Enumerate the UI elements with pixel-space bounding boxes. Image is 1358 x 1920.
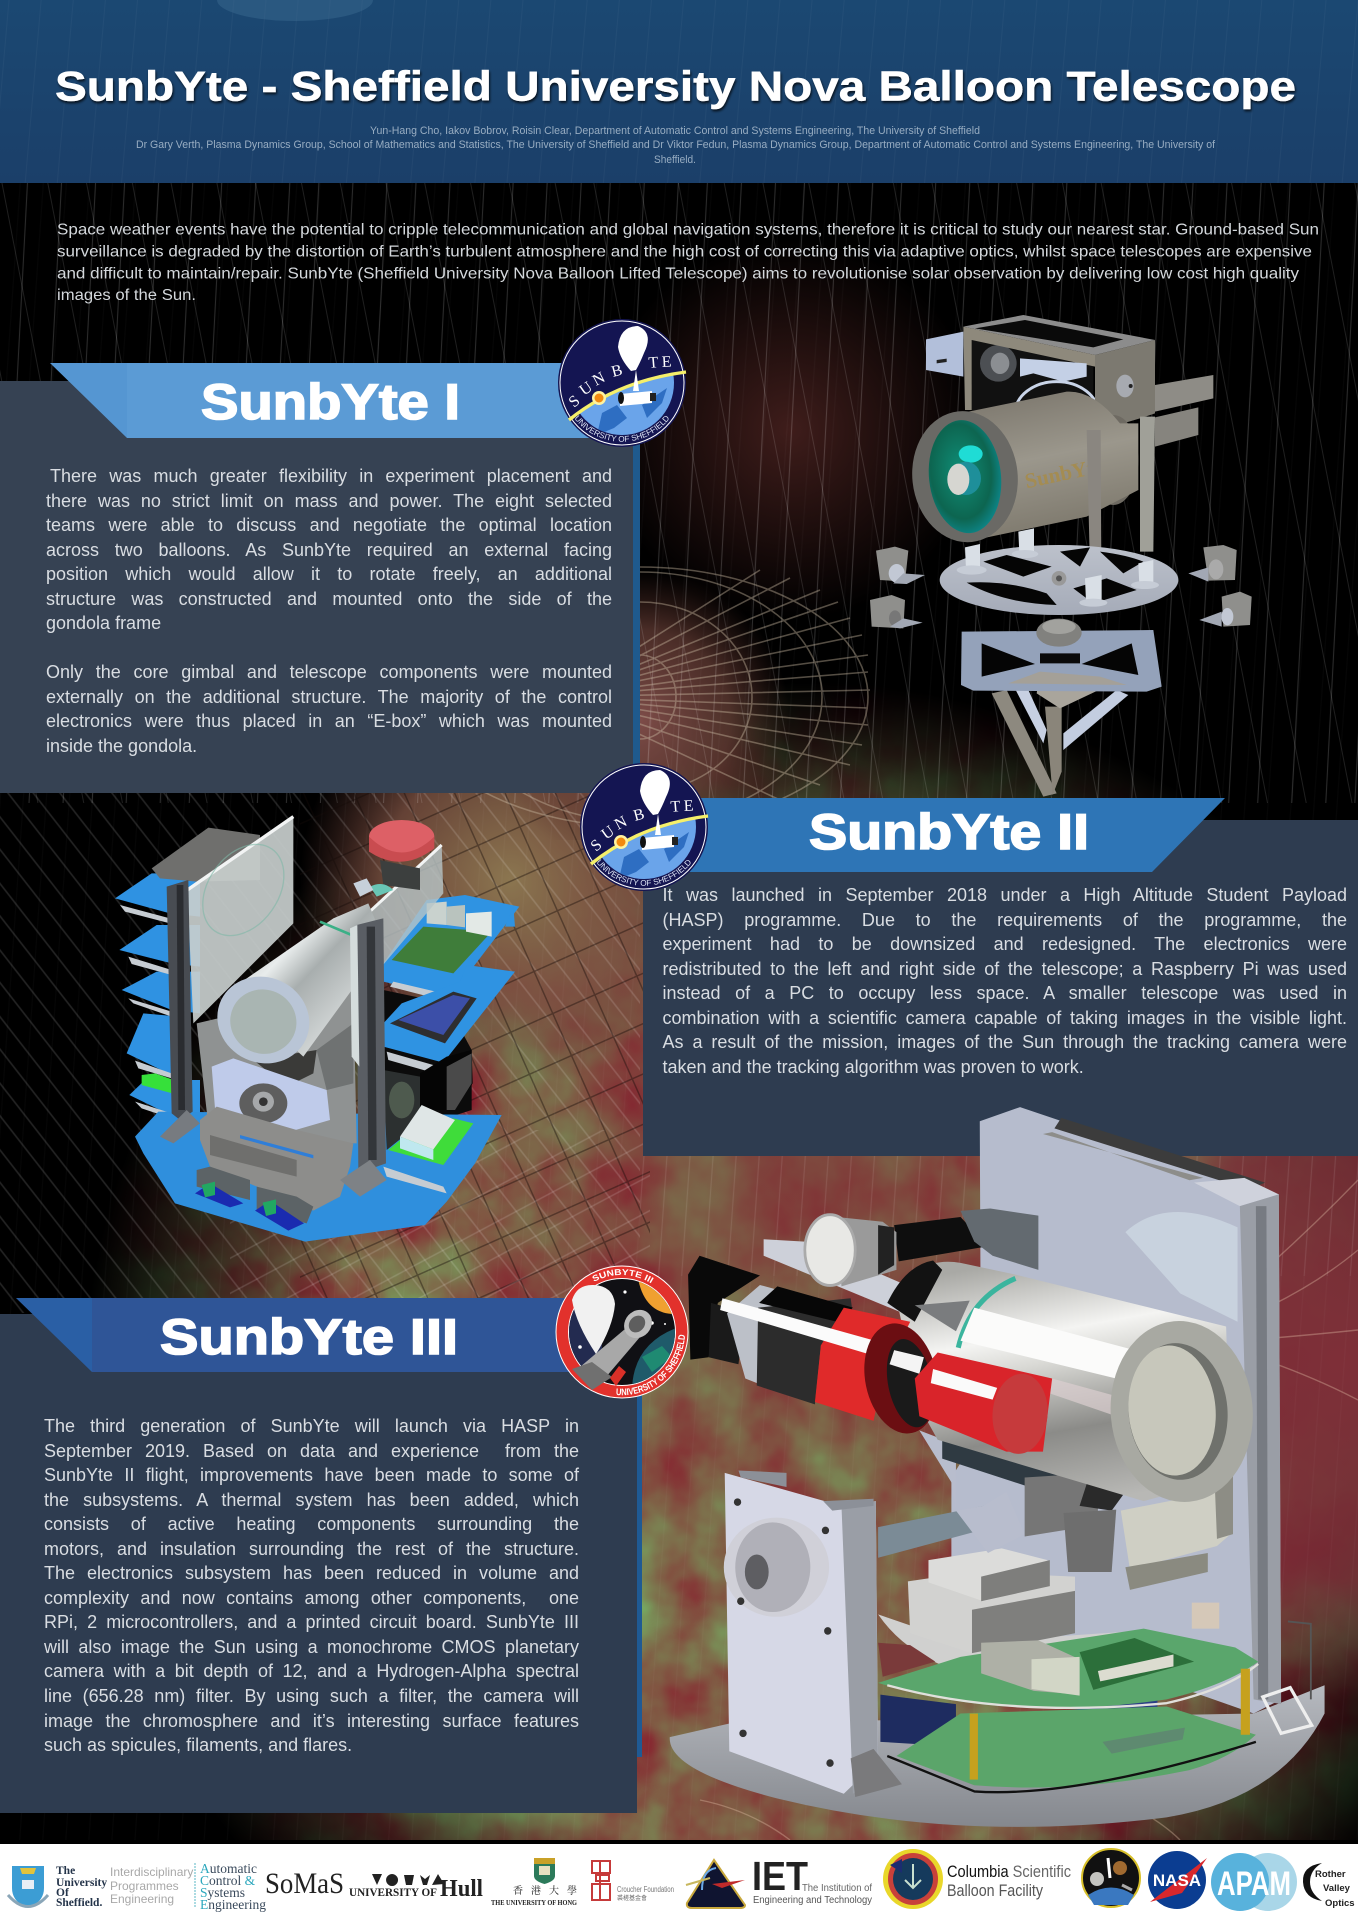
logo: University of Sheffield: The bbox=[56, 1865, 75, 1877]
body text: SunbYte II bbox=[662, 885, 1347, 1077]
body text: SunbYte II: It was launched in September 2018 under a High Altitude Student Payload bbox=[662, 885, 1347, 905]
badge: SunbYte III mission patch bbox=[556, 1266, 688, 1398]
logo: IET: Engineering and Technology bbox=[753, 1895, 872, 1906]
body text: SunbYte III: line (656.28 nm) filter. By using such a filter, the camera will bbox=[44, 1686, 579, 1706]
logo: University of Hong Kong: THE UNIVERSITY OF HONG bbox=[491, 1898, 577, 1907]
logo: Croucher Foundation: 裘槎基金會 bbox=[617, 1893, 647, 1902]
badge: SunbYte II mission patch: N bbox=[612, 813, 630, 834]
authors line 3: Sheffield. bbox=[654, 154, 696, 166]
logo: Automatic Control and Systems Engineering bbox=[195, 1861, 266, 1912]
body text: SunbYte II: instead of a PC to occupy less space. A smaller telescope was used in bbox=[662, 983, 1347, 1003]
panel: SunbYte II bbox=[643, 798, 1358, 1156]
body text: SunbYte III: such as spicules, filaments, and flares. bbox=[44, 1735, 352, 1755]
body text: SunbYte I: gondola frame bbox=[46, 613, 161, 633]
body text: SunbYte III: The third generation of SunbYte will launch via HASP in bbox=[44, 1416, 579, 1436]
badge: SunbYte I mission patch bbox=[558, 319, 686, 447]
illustration: SunbYte I exploded telescope and gimbal: SunbYt bbox=[1023, 455, 1097, 493]
ribbon and heading: SunbYte III bbox=[16, 1298, 569, 1372]
logo: Interdisciplinary Programmes Engineering bbox=[110, 1865, 193, 1906]
logo: Automatic Control and Systems Engineering: Systems bbox=[200, 1885, 245, 1900]
body text: SunbYte III: will also image the Sun using a monochrome CMOS planetary bbox=[44, 1637, 579, 1657]
badge: SunbYte I mission patch: N bbox=[590, 369, 608, 390]
body text: SunbYte I bbox=[46, 466, 612, 756]
logo: HASP mission patch bbox=[1082, 1849, 1140, 1907]
header band bbox=[0, 0, 1358, 183]
ribbon and heading: SunbYte I: SunbYte I bbox=[201, 374, 460, 430]
body text: SunbYte I: teams were able to discuss and negotiate the optimal location bbox=[46, 515, 612, 535]
body text: SunbYte I: across two balloons. As SunbYte required an external facing bbox=[46, 540, 612, 560]
body text: SunbYte III: SunbYte II flight, improvements have been made to some of bbox=[44, 1465, 579, 1485]
badge: SunbYte II mission patch bbox=[580, 763, 708, 891]
logo: NASA: NASA bbox=[1153, 1871, 1201, 1890]
body text: SunbYte I: position which would allow it to rotate freely, an additional bbox=[46, 564, 612, 584]
logo: IET: IET bbox=[752, 1853, 808, 1899]
ribbon and heading: SunbYte I bbox=[50, 363, 590, 438]
body text: SunbYte III: motors, and insulation surrounding the rest of the structure. bbox=[44, 1539, 579, 1559]
body text: SunbYte I: There was much greater flexibility in experiment placement and bbox=[50, 466, 612, 486]
logo: Rother Valley Optics: Valley bbox=[1323, 1883, 1351, 1894]
logo: Automatic Control and Systems Engineering: Automatic bbox=[200, 1861, 257, 1876]
logo strip bbox=[0, 1840, 1358, 1920]
logo: University of Sheffield: Of bbox=[56, 1887, 69, 1899]
intro text: and difficult to maintain/repair. SunbYte (Sheffield University Nova Balloon Lifted Telescope) aims to revolutionise solar observation by delivering low cost high quality bbox=[57, 266, 1299, 282]
intro text bbox=[57, 222, 1319, 304]
logo: University of Sheffield: Sheffield. bbox=[56, 1897, 102, 1909]
logo: University of Hull bbox=[349, 1874, 483, 1902]
body text: SunbYte II: combination with a scientific camera capable of taking images in the visible light. bbox=[662, 1008, 1347, 1028]
panel: SunbYte III bbox=[0, 1298, 642, 1813]
body text: SunbYte III: camera with a bit depth of 12, and a Hydrogen-Alpha spectral bbox=[44, 1661, 579, 1681]
body text: SunbYte III: The electronics subsystem has been reduced in volume and bbox=[44, 1563, 579, 1583]
body text: SunbYte I: externally on the additional structure. The majority of the control bbox=[46, 687, 612, 707]
badge: SunbYte II mission patch: S bbox=[588, 836, 605, 855]
logo: Columbia Scientific Balloon Facility: Columbia Scientific bbox=[947, 1863, 1071, 1881]
logo: IET: The Institution of bbox=[802, 1883, 872, 1894]
badge: SunbYte I mission patch: S bbox=[566, 392, 583, 411]
logo: NASA bbox=[1148, 1851, 1207, 1909]
ribbon and heading: SunbYte III: SunbYte III bbox=[160, 1309, 458, 1365]
logo: Interdisciplinary Programmes Engineering: Programmes bbox=[110, 1879, 179, 1893]
body text: SunbYte I: structure was constructed and mounted onto the side of the bbox=[46, 589, 612, 609]
badge: SunbYte III mission patch: SUNBYTE III bbox=[592, 1269, 654, 1284]
ribbon and heading: SunbYte II bbox=[690, 798, 1225, 872]
intro text: Space weather events have the potential to cripple telecommunication and global navigation systems, therefore it is critical to study our nearest star. Ground-based Sun bbox=[57, 222, 1319, 238]
badge: SunbYte III mission patch: UNIVERSITY OF SHEFFIELD bbox=[616, 1334, 685, 1396]
logo: University of Sheffield: University bbox=[56, 1877, 107, 1889]
badge: SunbYte I mission patch: U bbox=[577, 378, 596, 399]
logo: University of Hong Kong bbox=[491, 1858, 585, 1907]
body text: SunbYte I: inside the gondola. bbox=[46, 736, 197, 756]
badge: SunbYte II mission patch: T bbox=[670, 798, 681, 816]
body text: SunbYte III: September 2019. Based on data and experience from the bbox=[44, 1441, 579, 1461]
logo: Croucher Foundation: Croucher Foundation bbox=[617, 1885, 674, 1894]
badge: SunbYte I mission patch: E bbox=[661, 354, 672, 371]
logo: Rother Valley Optics bbox=[1303, 1863, 1355, 1909]
logo: SoMaS: SoMaS bbox=[265, 1867, 344, 1900]
badge: SunbYte I mission patch: B bbox=[610, 362, 624, 381]
logo: Automatic Control and Systems Engineering: Engineering bbox=[200, 1897, 266, 1912]
badge: SunbYte II mission patch: UNIVERSITY OF SHEFFIELD bbox=[597, 859, 690, 886]
logo: Interdisciplinary Programmes Engineering: Interdisciplinary bbox=[110, 1865, 193, 1879]
logo: Automatic Control and Systems Engineering: Control & bbox=[200, 1873, 256, 1888]
logo: University of Hull: UNIVERSITY OF bbox=[349, 1885, 437, 1899]
logo: Rother Valley Optics: Optics bbox=[1325, 1898, 1355, 1909]
illustration: SunbYte II payload stack bbox=[115, 815, 520, 1242]
logo: University of Hong Kong: 香港大學 bbox=[513, 1882, 585, 1897]
body text: SunbYte II: As a result of the mission, images of the Sun through the tracking camera were bbox=[662, 1032, 1347, 1052]
intro text: images of the Sun. bbox=[57, 287, 196, 304]
panel: SunbYte I bbox=[0, 363, 640, 793]
badge: SunbYte II mission patch: U bbox=[599, 822, 618, 843]
authors line 1: Yun-Hang Cho, Iakov Bobrov, Roisin Clear, Department of Automatic Control and Systems Engineering, The University of Sheffield bbox=[370, 125, 980, 137]
logo: triangular mission patch bbox=[686, 1860, 745, 1908]
body text: SunbYte III: the subsystems. A thermal system has been added, which bbox=[44, 1490, 579, 1510]
logo: Columbia Scientific Balloon Facility: Balloon Facility bbox=[947, 1882, 1044, 1900]
logo: Croucher Foundation bbox=[592, 1861, 674, 1902]
body text: SunbYte II: experiment had to be downsized and redesigned. The electronics were bbox=[662, 934, 1347, 954]
logo: University of Hull: Hull bbox=[440, 1876, 483, 1902]
intro text: surveillance is degraded by the distortion of Earth’s turbulent atmosphere and the high cost of correcting this via adaptive optics, whilst space telescopes are expensive bbox=[57, 244, 1312, 260]
body text: SunbYte II: redistributed to the left and right side of the telescope; a Raspberry Pi was used bbox=[662, 959, 1347, 979]
badge: SunbYte II mission patch: E bbox=[683, 798, 694, 815]
body text: SunbYte III: consists of active heating components surrounding the bbox=[44, 1514, 579, 1534]
body text: SunbYte III: complexity and now contains among other components, one bbox=[44, 1588, 579, 1608]
authors line 2: Dr Gary Verth, Plasma Dynamics Group, School of Mathematics and Statistics, The University of Sheffield and Dr Viktor Fedun, Plasma Dynamics Group, Department of Automatic Control and Systems Engineering, The University of bbox=[136, 139, 1216, 151]
body text: SunbYte I: Only the core gimbal and telescope components were mounted bbox=[46, 662, 612, 682]
badge: SunbYte II mission patch: B bbox=[632, 806, 646, 825]
body text: SunbYte III: RPi, 2 microcontrollers, and a printed circuit board. SunbYte III bbox=[44, 1612, 579, 1632]
logo: IET bbox=[752, 1853, 872, 1906]
illustration: SunbYte I exploded telescope and gimbal bbox=[870, 315, 1252, 797]
body text: SunbYte III bbox=[44, 1416, 580, 1755]
logo: APAM bbox=[1211, 1853, 1297, 1911]
body text: SunbYte II: (HASP) programme. Due to the requirements of the programme, the bbox=[662, 910, 1347, 930]
badge: SunbYte I mission patch: UNIVERSITY OF SHEFFIELD bbox=[575, 415, 668, 442]
body text: SunbYte I: electronics were thus placed in an “E-box” which was mounted bbox=[46, 711, 612, 731]
logo: Columbia Scientific Balloon Facility bbox=[883, 1849, 1071, 1909]
logo: Interdisciplinary Programmes Engineering: Engineering bbox=[110, 1892, 174, 1906]
logo: APAM: APAM bbox=[1217, 1865, 1291, 1903]
logo: Rother Valley Optics: Rother bbox=[1315, 1869, 1346, 1880]
title: SunbYte - Sheffield University Nova Balloon Telescope bbox=[55, 62, 1296, 110]
body text: SunbYte III: image the chromosphere and it’s interesting surface features bbox=[44, 1711, 579, 1731]
illustration: SunbYte III gondola telescope bbox=[670, 1107, 1325, 1827]
badge: SunbYte I mission patch: T bbox=[648, 354, 659, 372]
logo: University of Sheffield bbox=[8, 1865, 107, 1909]
body text: SunbYte II: taken and the tracking algorithm was proven to work. bbox=[662, 1057, 1084, 1077]
ribbon and heading: SunbYte II: SunbYte II bbox=[809, 804, 1089, 860]
body text: SunbYte I: there was no strict limit on mass and power. The eight selected bbox=[46, 491, 612, 511]
